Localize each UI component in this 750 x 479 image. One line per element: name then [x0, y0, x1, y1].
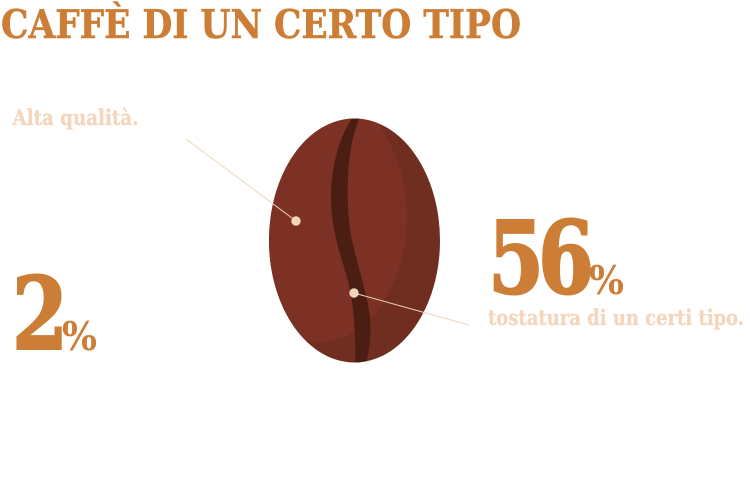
- callout line: tostatura: [354, 293, 469, 325]
- stat: 56 percent: %: [589, 258, 624, 304]
- callout line: alta qualità: [186, 139, 296, 221]
- title: CAFFÈ DI UN CERTO TIPO: [1, 1, 521, 48]
- callout dot: tostatura: [349, 288, 359, 298]
- bean body shadow: [269, 118, 440, 362]
- stat: 2 percent: %: [62, 314, 97, 360]
- callout dot: alta qualità: [291, 216, 301, 226]
- stat: 2 percent: 2: [12, 255, 68, 373]
- stat: 56 percent: [488, 199, 624, 317]
- label: alta qualità: Alta qualità.: [12, 105, 138, 130]
- bean light face: [260, 110, 407, 342]
- bean crease: [331, 117, 371, 364]
- label: tostatura: tostatura di un certi tipo.: [488, 305, 744, 330]
- coffee bean: [260, 110, 440, 364]
- stat: 56 percent: 6: [538, 199, 594, 317]
- stat: 56 percent: 5: [488, 199, 544, 317]
